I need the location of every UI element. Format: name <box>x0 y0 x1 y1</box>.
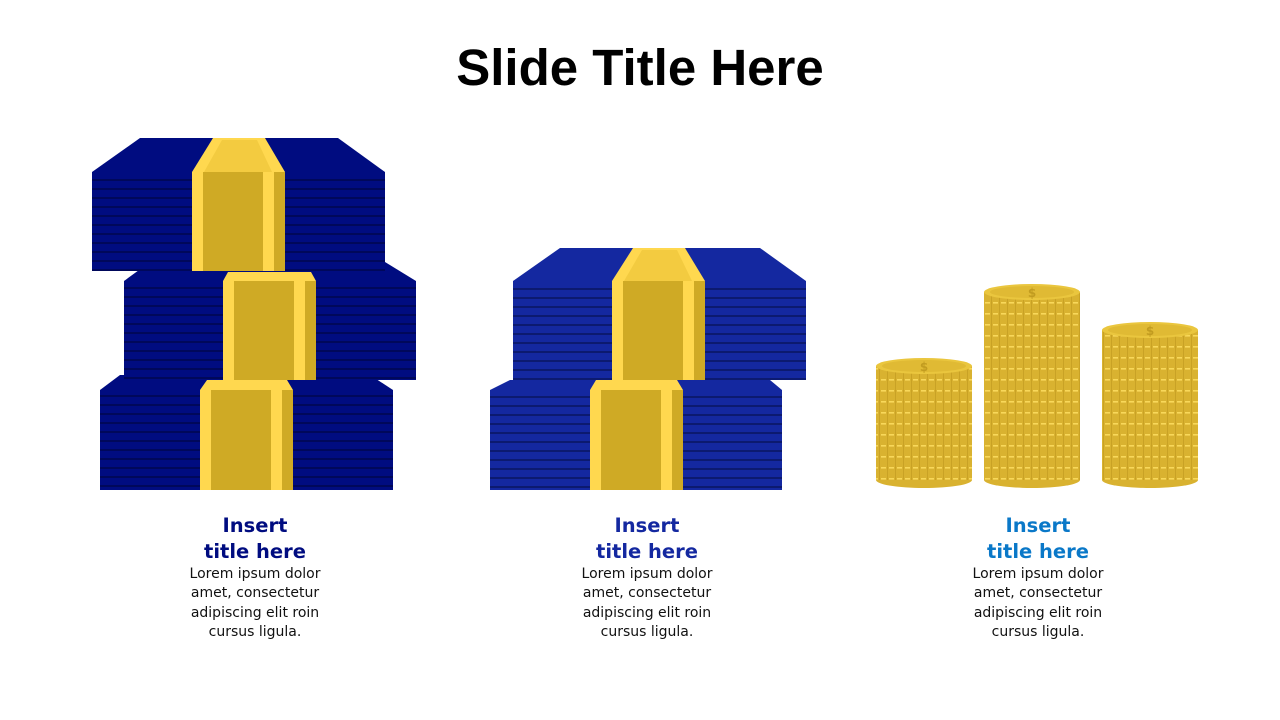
text block: column 2: Lorem ipsum dolor <box>582 566 712 582</box>
text block: column 2: amet, consectetur <box>583 585 711 601</box>
bill stack top <box>513 248 806 380</box>
text block: column 3: Insert <box>1006 514 1070 537</box>
text block: column 1: amet, consectetur <box>191 585 319 601</box>
text block: column 3 <box>973 514 1104 640</box>
text block: column 1 <box>190 514 320 640</box>
text block: column 1: Lorem ipsum dolor <box>190 566 320 582</box>
text block: column 3: adipiscing elit roin <box>974 605 1102 621</box>
coin stack tall: $ <box>1028 286 1036 300</box>
text block: column 3: title here <box>987 540 1089 563</box>
coin stack tall <box>984 284 1080 488</box>
text block: column 3: amet, consectetur <box>974 585 1102 601</box>
coin stack small: $ <box>920 360 928 374</box>
text block: column 1: adipiscing elit roin <box>191 605 319 621</box>
coin stack small <box>876 358 972 488</box>
text block: column 2: Insert <box>615 514 679 537</box>
text block: column 2: title here <box>596 540 698 563</box>
text block: column 1: title here <box>204 540 306 563</box>
text block: column 2 <box>582 514 712 640</box>
title: Slide Title Here <box>456 39 824 96</box>
bill stack bottom <box>100 375 393 490</box>
icon: stack of banknotes (large) <box>92 138 416 490</box>
coin stack medium: $ <box>1146 324 1154 338</box>
text block: column 3: cursus ligula. <box>992 624 1084 640</box>
text block: column 1: cursus ligula. <box>209 624 301 640</box>
text block: column 1: Insert <box>223 514 287 537</box>
coin stack medium <box>1102 322 1198 488</box>
bill stack top <box>92 138 385 271</box>
text block: column 2: adipiscing elit roin <box>583 605 711 621</box>
icon: stack of banknotes (medium) <box>490 248 806 490</box>
icon: coin stacks <box>876 284 1198 488</box>
text block: column 3: Lorem ipsum dolor <box>973 566 1103 582</box>
text block: column 2: cursus ligula. <box>601 624 693 640</box>
bill stack bottom <box>490 380 782 490</box>
bill stack middle <box>124 262 416 380</box>
